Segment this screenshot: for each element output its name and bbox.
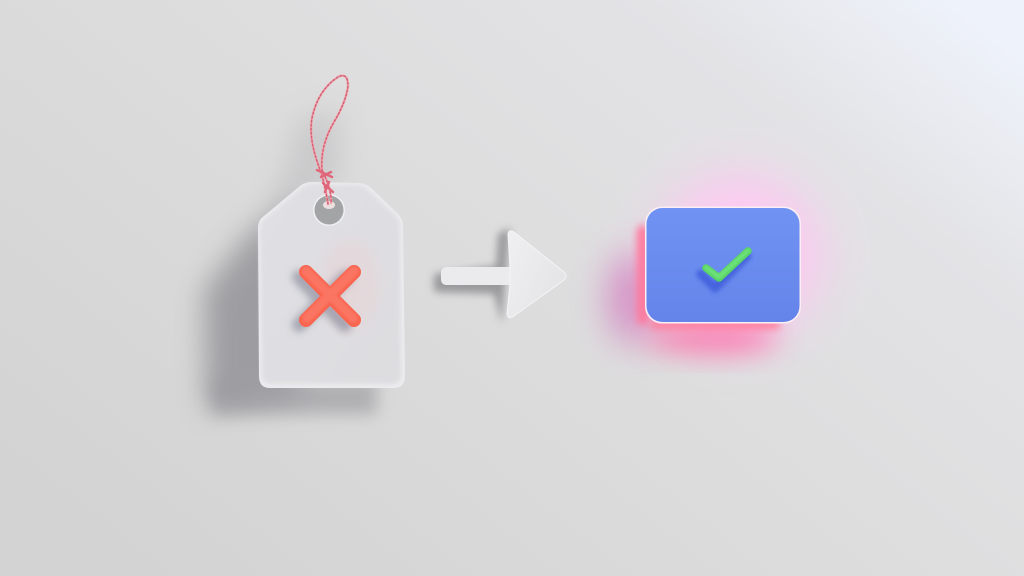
arrow shadow (434, 228, 510, 324)
arrow (434, 228, 566, 324)
red cross (299, 271, 354, 325)
tag cast shadow (204, 110, 377, 414)
arrow head (507, 231, 566, 318)
tag body (258, 182, 405, 388)
card (645, 206, 801, 324)
approved card with check (608, 175, 822, 354)
arrow shaft (441, 267, 515, 285)
green check (701, 250, 748, 288)
string loop (311, 76, 348, 204)
pink glow (608, 175, 822, 354)
tag hole (313, 194, 345, 226)
price tag with cross (204, 76, 405, 414)
